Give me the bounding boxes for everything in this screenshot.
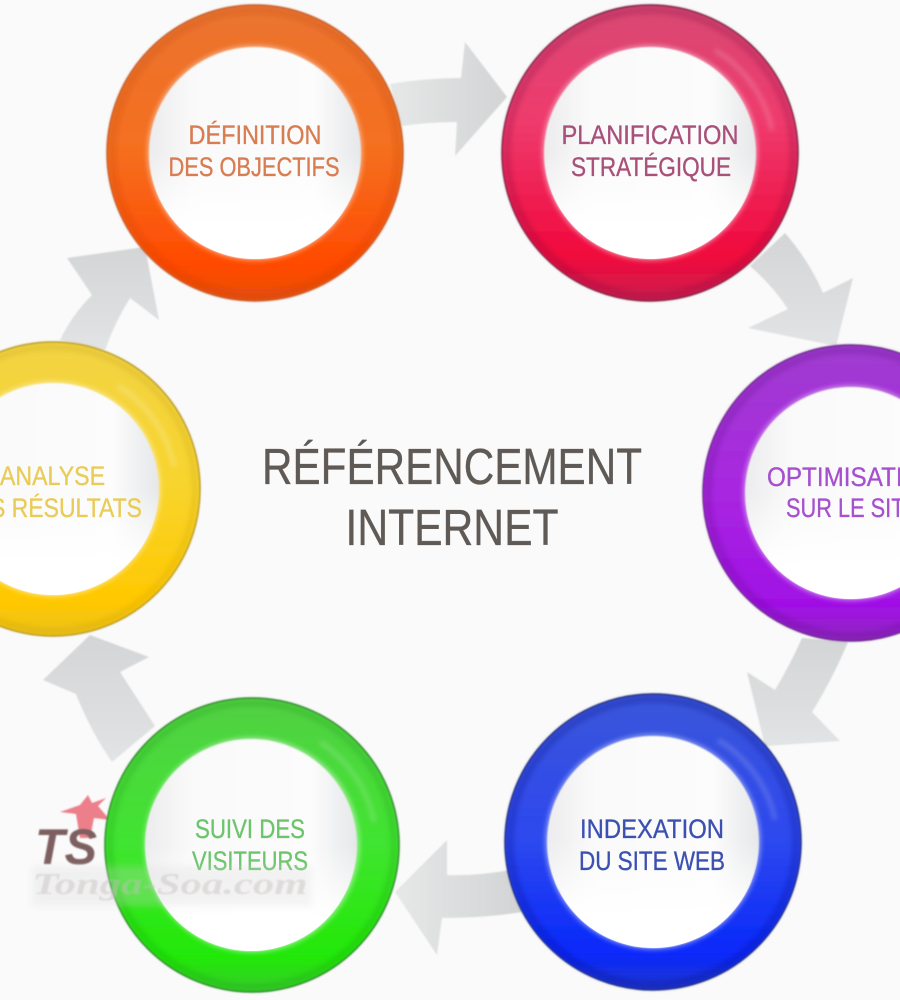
watermark: Tonga-Soa palm and TS logo: TS (35, 819, 97, 875)
circle: suivi des visiteurs: VISITEURS (192, 846, 308, 876)
circle: suivi des visiteurs (105, 698, 399, 992)
title: RÉFÉRENCEMENT (262, 438, 642, 495)
circle: indexation du site web (505, 694, 801, 990)
arrow: optimisation to indexation (747, 638, 848, 746)
circle: définition des objectifs: DES OBJECTIFS (168, 152, 340, 182)
circle: planification stratégique: PLANIFICATION (562, 120, 738, 150)
circle: analyse des résultats (0, 342, 200, 636)
title (262, 438, 642, 556)
watermark: Tonga-Soa.com band over the green circle (32, 866, 312, 906)
circle: indexation du site web: INDEXATION (580, 814, 724, 844)
circle: définition des objectifs (107, 5, 403, 301)
circle: définition des objectifs: DÉFINITION (188, 120, 322, 150)
circle: optimisation sur le site (703, 345, 900, 641)
arrow: analyse to objectifs (60, 247, 159, 350)
watermark: Tonga-Soa palm and TS logo (35, 795, 110, 875)
circle: indexation du site web: DU SITE WEB (579, 846, 725, 876)
arrow: objectifs to planification (390, 42, 507, 156)
circle: planification stratégique: STRATÉGIQUE (571, 152, 731, 182)
title: INTERNET (346, 499, 558, 556)
circle: analyse des résultats: ANALYSE (0, 461, 105, 491)
arrow: suivi to analyse (43, 635, 155, 762)
arrow: indexation to suivi (395, 840, 522, 955)
arrow: planification to optimisation (748, 233, 853, 346)
watermark: Tonga-Soa.com band over the green circle: Tonga-Soa.com (32, 866, 308, 901)
circle: suivi des visiteurs: SUIVI DES (195, 814, 305, 844)
circle: planification stratégique (502, 5, 798, 301)
